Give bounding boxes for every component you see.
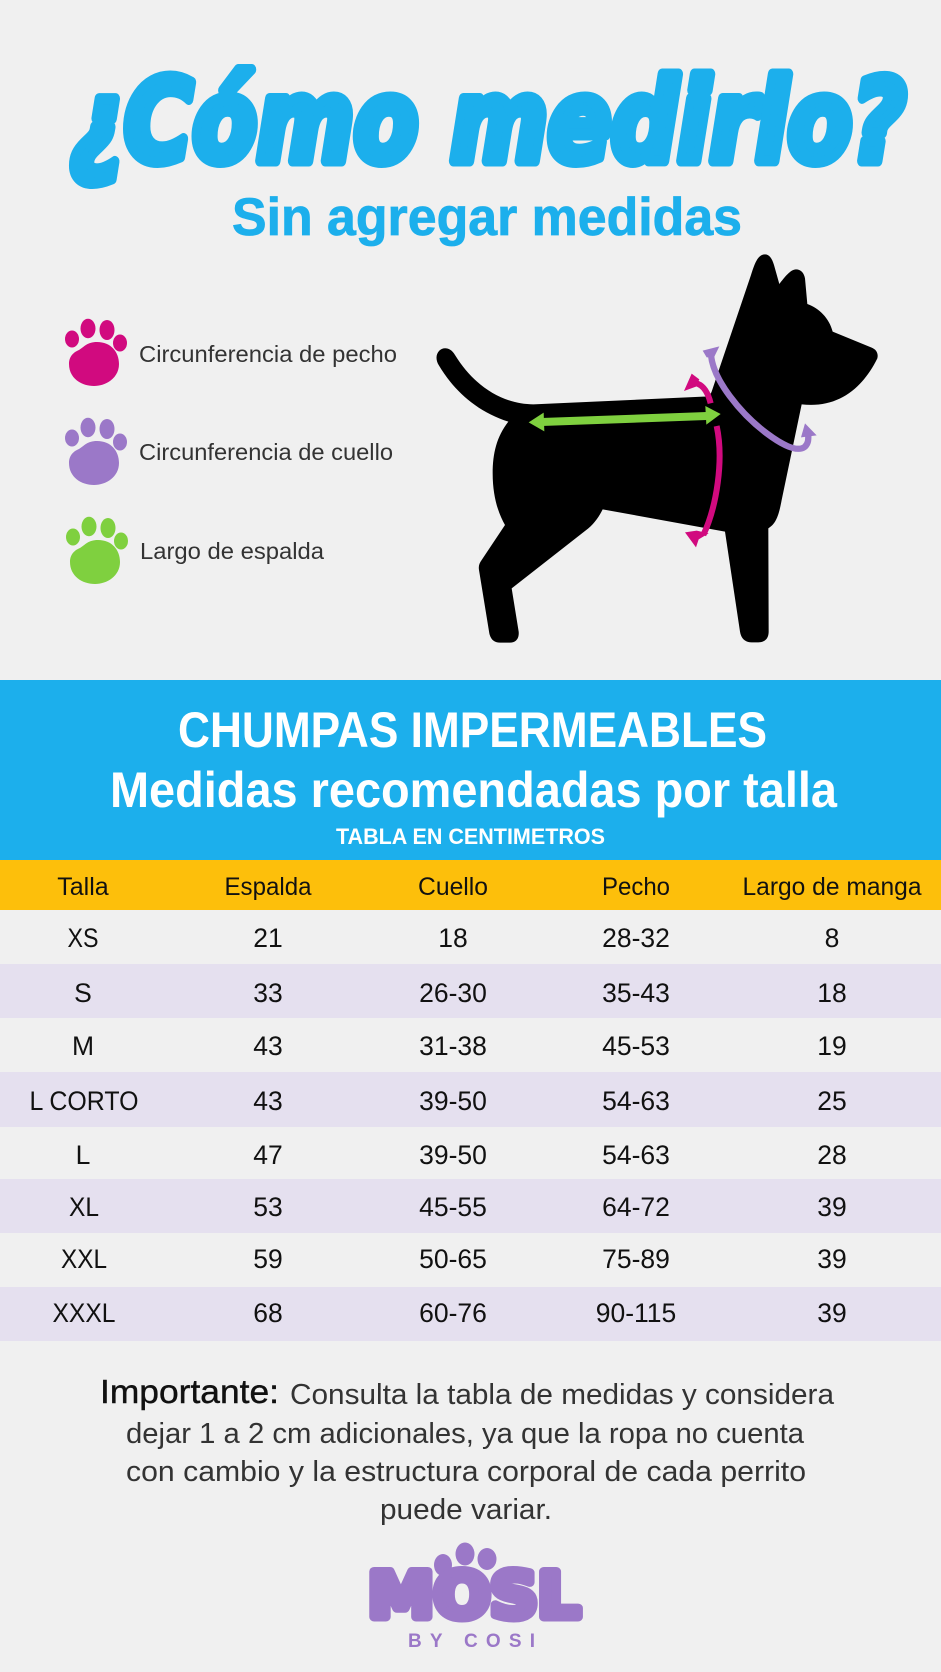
row S [0, 964, 941, 1018]
row XS: 18 [438, 923, 468, 953]
row M: 43 [253, 1031, 283, 1061]
row XXXL: 68 [253, 1298, 283, 1328]
row XL: 64-72 [602, 1192, 670, 1222]
row L: 28 [817, 1140, 847, 1170]
important note: dejar 1 a 2 cm adicionales, ya que la ropa no cuenta [126, 1418, 805, 1450]
size table [0, 860, 941, 1341]
row S: 26-30 [419, 978, 487, 1008]
row L CORTO: 43 [253, 1086, 283, 1116]
row XL [0, 1179, 941, 1233]
row M: 31-38 [419, 1031, 487, 1061]
legend [65, 319, 397, 584]
subtitle: Sin agregar medidas [232, 188, 742, 247]
arrow: circunferencia de pecho [684, 374, 720, 547]
logo [368, 1542, 580, 1652]
row L CORTO: 25 [817, 1086, 847, 1116]
logo tagline: BY COSI [408, 1631, 535, 1652]
row M: 45-53 [602, 1031, 670, 1061]
row XL: 53 [253, 1192, 283, 1222]
dog silhouette [436, 254, 878, 643]
logo wordmark: MOSL [368, 1559, 580, 1632]
table header: Talla [57, 873, 109, 901]
table header: Pecho [602, 873, 670, 901]
note lead-in: Importante: [100, 1373, 279, 1410]
dog diagram [436, 254, 878, 643]
important note: Consulta la tabla de medidas y considera [290, 1379, 835, 1411]
table header: Espalda [224, 873, 312, 901]
legend item: circunferencia de pecho: Circunferencia de pecho [139, 341, 397, 367]
row XXL: 75-89 [602, 1244, 670, 1274]
row L CORTO: 54-63 [602, 1086, 670, 1116]
row XXL: 50-65 [419, 1244, 487, 1274]
legend item: circunferencia de cuello [65, 418, 393, 485]
legend item: largo de espalda [66, 517, 324, 584]
row L CORTO [0, 1072, 941, 1127]
row L: L [76, 1140, 90, 1170]
table header: Largo de manga [742, 873, 922, 901]
table header: Cuello [418, 873, 488, 901]
legend item: circunferencia de pecho [65, 319, 397, 386]
row L [76, 1140, 847, 1170]
row XS: XS [68, 923, 98, 953]
row XL: XL [69, 1192, 99, 1222]
panel heading line 1: CHUMPAS IMPERMEABLES [178, 702, 767, 758]
row XXXL: XXXL [52, 1298, 116, 1328]
row XS [68, 923, 839, 953]
row XXL: 59 [253, 1244, 283, 1274]
blue header panel [0, 680, 941, 860]
row L: 54-63 [602, 1140, 670, 1170]
row XXXL: 39 [817, 1298, 847, 1328]
important note [100, 1373, 835, 1526]
row XS: 8 [825, 923, 839, 953]
row XS: 28-32 [602, 923, 670, 953]
row L CORTO: L CORTO [30, 1086, 138, 1116]
arrow: largo de espalda [529, 406, 721, 431]
row XXXL: 90-115 [596, 1298, 676, 1328]
row S: 33 [253, 978, 283, 1008]
row XXL [61, 1244, 847, 1274]
panel heading line 2: Medidas recomendadas por talla [110, 762, 838, 818]
row XXL: XXL [61, 1244, 107, 1274]
row XL: 39 [817, 1192, 847, 1222]
row M: M [72, 1031, 94, 1061]
arrow: circunferencia de cuello [703, 346, 817, 449]
row S: 35-43 [602, 978, 670, 1008]
row L: 39-50 [419, 1140, 487, 1170]
row L: 47 [253, 1140, 283, 1170]
table header [0, 860, 941, 910]
row L CORTO: 39-50 [419, 1086, 487, 1116]
row XL: 45-55 [419, 1192, 487, 1222]
logo paw toes [434, 1542, 496, 1576]
row XXXL [0, 1287, 941, 1341]
row M: 19 [817, 1031, 847, 1061]
row S: 18 [817, 978, 847, 1008]
important note: puede variar. [380, 1494, 552, 1526]
row M [72, 1031, 847, 1061]
row XS: 21 [253, 923, 283, 953]
legend item: largo de espalda: Largo de espalda [140, 538, 324, 564]
row XXXL: 60-76 [419, 1298, 487, 1328]
legend item: circunferencia de cuello: Circunferencia de cuello [139, 439, 393, 465]
panel caption: TABLA EN CENTIMETROS [336, 824, 605, 849]
row S: S [74, 978, 92, 1008]
row XXL: 39 [817, 1244, 847, 1274]
important note: con cambio y la estructura corporal de cada perrito [126, 1456, 806, 1488]
